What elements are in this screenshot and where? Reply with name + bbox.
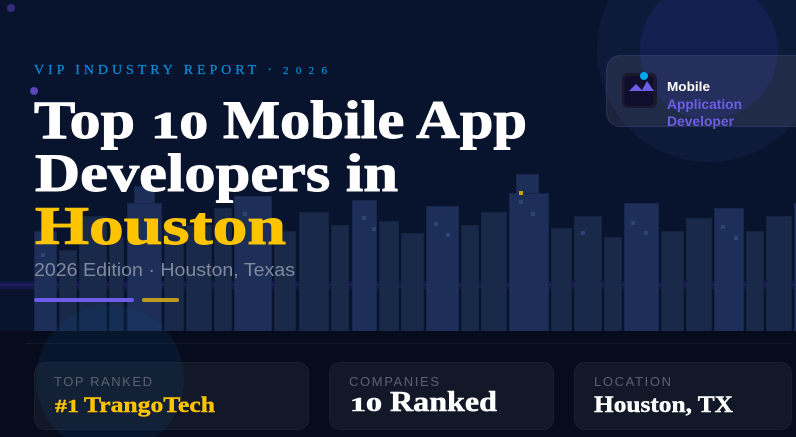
horizon band <box>0 281 796 289</box>
badge text: Application <box>667 96 742 112</box>
title: Mobile App <box>223 90 527 150</box>
accent bar: purple <box>34 298 134 302</box>
stat card: companies: COMPANIES <box>349 374 439 389</box>
badge text: Developer <box>667 113 735 129</box>
stat card: companies <box>330 362 554 430</box>
stat card: top ranked <box>34 362 308 430</box>
stat card: location <box>574 362 792 430</box>
eyebrow: VIP INDUSTRY REPORT · <box>34 63 272 78</box>
decorative circles: top right <box>597 0 796 162</box>
eyebrow: 2026 <box>283 65 328 77</box>
badge text <box>667 79 742 129</box>
stat card: companies: 10 <box>350 394 382 416</box>
badge text: Mobile <box>667 79 710 94</box>
decorative dot: top left <box>7 4 15 12</box>
title <box>34 90 527 256</box>
city skyline <box>34 174 796 332</box>
title: Houston <box>35 196 286 256</box>
stat card: companies: Ranked <box>390 387 497 418</box>
stat card: location: LOCATION <box>594 374 671 389</box>
title: Developers in <box>35 143 398 203</box>
decorative circle: lower left <box>36 305 184 437</box>
title: 10 <box>151 105 208 147</box>
icon: app image <box>622 72 657 108</box>
stat card: location: Houston, TX <box>594 392 733 417</box>
stat card: top ranked: #1 <box>55 396 79 416</box>
decorative dot: above title <box>30 87 38 95</box>
badge: Mobile Application Developer <box>606 56 796 129</box>
subtitle: 2026 Edition · Houston, Texas <box>34 260 295 280</box>
accent bar: gold <box>142 298 179 302</box>
stat card: top ranked: TrangoTech <box>84 392 215 417</box>
title: Top <box>34 90 135 150</box>
footer strip <box>0 331 796 437</box>
stat card: top ranked: TOP RANKED <box>54 374 152 389</box>
